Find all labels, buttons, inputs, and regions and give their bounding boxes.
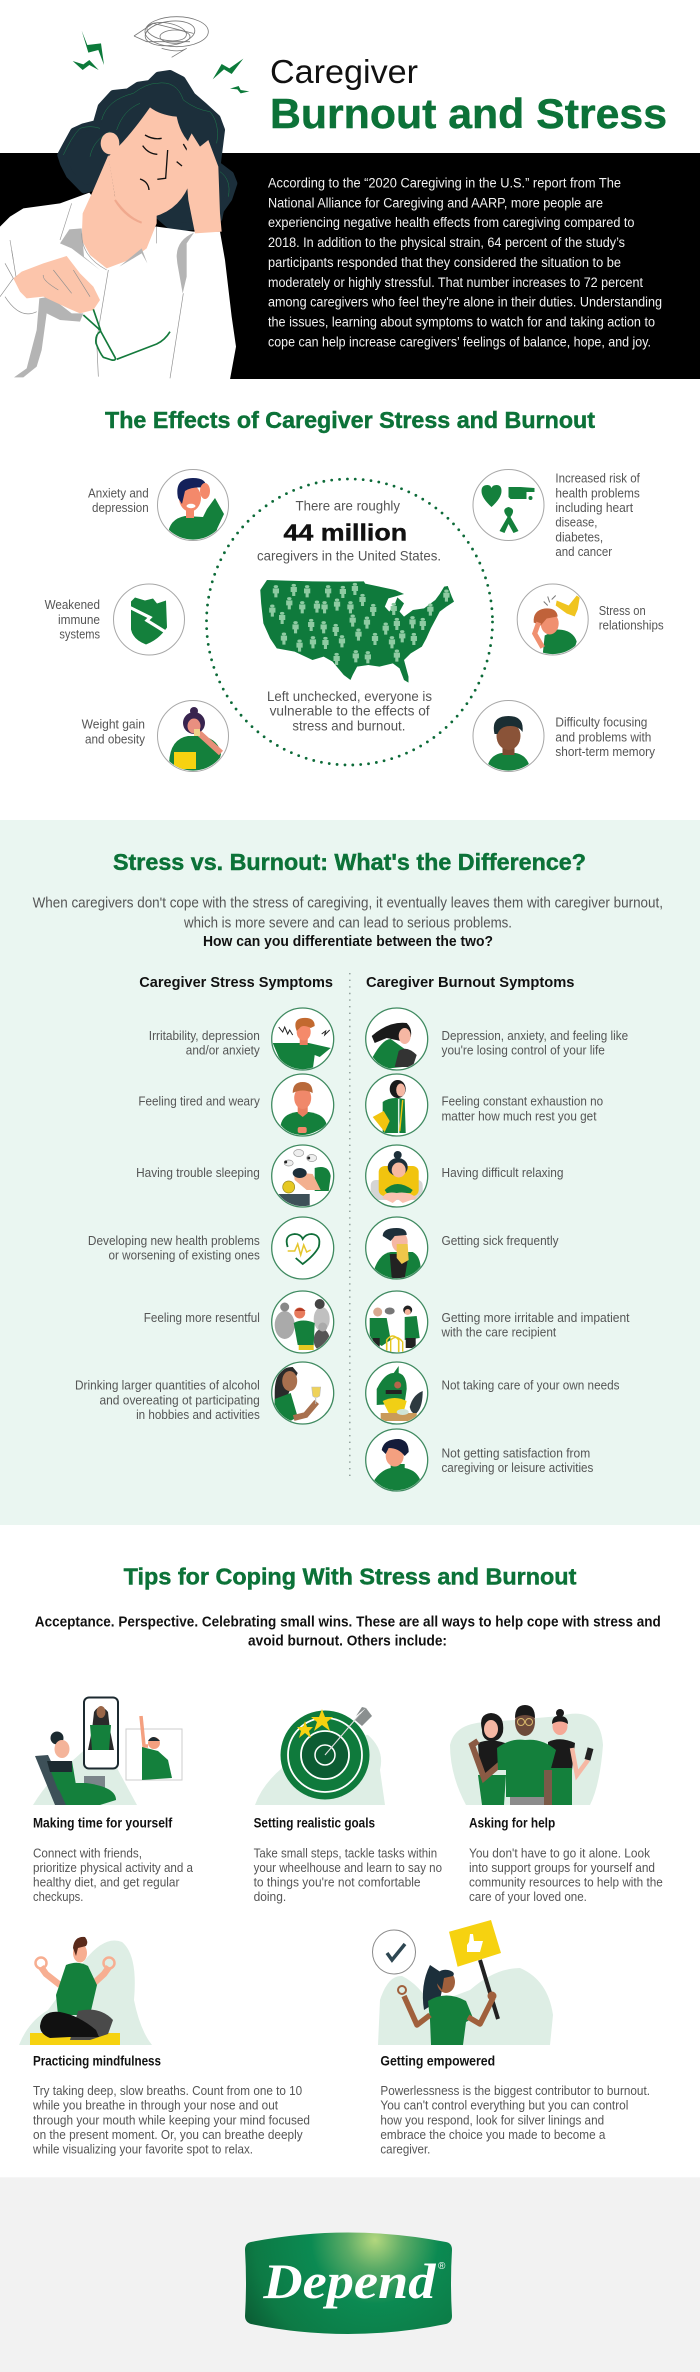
text: tip body: Take small steps, tackle tasks within xyxy=(254,1845,437,1860)
tip: setting realistic goals xyxy=(254,1707,442,1904)
effect: difficulty focusing: short-term memory xyxy=(555,744,655,759)
text: lead-in xyxy=(35,1615,661,1650)
text: intro paragraph: moderately or highly stressful. That number increases to 72 percent xyxy=(268,275,643,290)
text: tip body: You can't control everything but you can control xyxy=(380,2098,628,2113)
effect: weakened immune systems: Weakened xyxy=(45,597,100,612)
text: tip body: through your mouth while keeping your mind focused xyxy=(33,2112,310,2127)
panel: footer xyxy=(0,2177,700,2372)
icon: person blamed by pointing hand xyxy=(517,584,588,655)
text: tip body: on the present moment. Or, you can breathe deeply xyxy=(33,2127,303,2142)
text: tip body: while you breathe in through your nose and out xyxy=(32,2098,278,2113)
tip: getting empowered xyxy=(372,1920,650,2157)
icon: woman with wine glass xyxy=(272,1362,334,1424)
text: intro paragraph xyxy=(268,176,662,350)
text: 44 million stat xyxy=(257,498,441,564)
text: tip body: embrace the choice you made to become a xyxy=(380,2127,606,2142)
panel: stress vs burnout xyxy=(0,820,700,1525)
text: left unchecked: stress and burnout. xyxy=(292,717,405,733)
effect: difficulty focusing: Difficulty focusing xyxy=(555,715,647,730)
symptom: losing control: you're losing control of your life xyxy=(442,1043,605,1058)
text: tip body: how you respond, look for silver linings and xyxy=(380,2112,604,2127)
map: United States with caregiver figures xyxy=(260,580,454,683)
symptom: health problems: or worsening of existing ones xyxy=(108,1248,260,1263)
effect: anxiety and depression: depression xyxy=(92,500,149,515)
text: tip body: while visualizing your favorite spot to relax. xyxy=(32,2142,253,2157)
text: 44 million stat: There are roughly xyxy=(296,498,400,514)
symptom: alcohol and overeating: in hobbies and activities xyxy=(136,1407,260,1422)
dotted circle xyxy=(206,479,492,765)
tip: practicing mindfulness: Practicing mindfulness xyxy=(33,2054,161,2069)
column headings: Caregiver Burnout Symptoms xyxy=(366,975,574,991)
tip: practicing mindfulness xyxy=(19,1937,310,2157)
text: tip body: Powerlessness is the biggest contributor to burnout. xyxy=(380,2083,650,2098)
text: tip body: You don't have to go it alone. Look xyxy=(469,1845,650,1860)
symptom: tired and weary: Feeling tired and weary xyxy=(138,1094,260,1109)
text: tip body: prioritize physical activity and a xyxy=(33,1860,194,1875)
icon: depressed woman xyxy=(366,1008,428,1070)
symptom: alcohol and overeating: and overeating ot participating xyxy=(100,1392,260,1407)
text: intro paragraph: According to the “2020 Caregiving in the U.S.” report from The xyxy=(268,176,621,190)
text: introduction xyxy=(33,895,663,950)
text: lead-in: avoid burnout. Others include: xyxy=(248,1634,447,1650)
effect: stress on relationships xyxy=(517,584,664,655)
symptom: difficult relaxing xyxy=(366,1145,564,1207)
illustration: meditating person xyxy=(19,1937,152,2045)
effect: weight gain and obesity: and obesity xyxy=(85,731,145,746)
effect: difficulty focusing xyxy=(473,700,655,772)
effect: anxiety and depression: Anxiety and xyxy=(88,485,149,500)
symptom: getting sick xyxy=(366,1217,559,1280)
effect: weakened immune systems: systems xyxy=(59,627,100,642)
text: tip body: to things you're not comfortable xyxy=(254,1874,421,1889)
effect: health problems: diabetes, xyxy=(555,529,603,544)
icon: caregiver and elder xyxy=(366,1291,428,1353)
text: intro paragraph: participants responded that they considered the situation to be xyxy=(268,255,621,270)
icon: unsatisfied man xyxy=(366,1429,428,1491)
text: introduction: How can you differentiate between the two? xyxy=(203,934,493,950)
effect: health problems: Increased risk of xyxy=(555,471,640,486)
heading: Stress vs. Burnout: What's the Difference? xyxy=(113,849,586,875)
symptom: constant exhaustion: Feeling constant exhaustion no xyxy=(442,1094,603,1109)
symptom: irritable with care recipient xyxy=(366,1291,630,1353)
text: intro paragraph: cope can help increase caregivers’ feelings of balance, hope, and joy. xyxy=(268,334,651,350)
icon: tired man xyxy=(272,1074,334,1136)
icon: anxious person xyxy=(158,470,228,540)
lower arm and glasses xyxy=(0,250,183,378)
effect: health problems: disease, xyxy=(555,515,597,530)
effect: health problems: and cancer xyxy=(555,544,613,559)
text: tip body xyxy=(254,1845,442,1904)
text: left unchecked: vulnerable to the effects of xyxy=(270,703,430,719)
effect: weakened immune systems: immune xyxy=(58,612,100,627)
text: tip body: into support groups for yourself and xyxy=(469,1860,655,1875)
symptom: irritability: and/or anxiety xyxy=(186,1043,260,1058)
panel: header xyxy=(0,17,700,379)
effect: weakened immune systems xyxy=(45,584,184,655)
column headings xyxy=(139,975,575,991)
symptom: no satisfaction xyxy=(366,1429,594,1491)
effect: health problems xyxy=(473,470,640,559)
text: tip body: your wheelhouse and learn to say no xyxy=(254,1860,442,1875)
symptom: health problems: Developing new health problems xyxy=(88,1233,260,1248)
text: introduction: which is more severe and can lead to serious problems. xyxy=(183,914,512,931)
icon: broken shield xyxy=(114,584,184,655)
symptom: tired and weary xyxy=(138,1074,334,1136)
panel: effects of stress and burnout xyxy=(45,407,664,772)
tip: making time for yourself xyxy=(33,1698,194,1904)
text: tip body xyxy=(33,1845,194,1904)
text: tip body xyxy=(380,2083,650,2157)
tip: asking for help xyxy=(450,1705,663,1904)
symptom: resentful: Feeling more resentful xyxy=(144,1310,260,1325)
effect: weight gain and obesity: Weight gain xyxy=(82,717,145,732)
text: intro paragraph: the issues, learning about symptoms to watch for and taking action to xyxy=(268,315,655,330)
symptom: constant exhaustion xyxy=(366,1074,603,1136)
logo: Depend: Depend xyxy=(262,2253,436,2309)
effect: stress on relationships: Stress on xyxy=(599,603,646,618)
effect: stress on relationships: relationships xyxy=(599,618,664,633)
effect: health problems: health problems xyxy=(555,485,640,500)
symptom: not taking care: Not taking care of your own needs xyxy=(442,1378,620,1393)
effect: health problems: including heart xyxy=(555,500,633,515)
effect: weight gain and obesity xyxy=(82,700,228,772)
symptom: alcohol and overeating: Drinking larger quantities of alcohol xyxy=(75,1378,260,1393)
symptom: getting sick: Getting sick frequently xyxy=(442,1233,559,1248)
icon: heart with pulse xyxy=(272,1217,334,1279)
title: Caregiver xyxy=(270,53,418,90)
text: tip body xyxy=(469,1845,663,1904)
symptom: losing control xyxy=(366,1008,628,1070)
icon: sick person with tissue xyxy=(366,1217,428,1280)
text: 44 million stat: caregivers in the United States. xyxy=(257,548,441,564)
text: left unchecked: Left unchecked, everyone is xyxy=(267,688,432,704)
upper body and head xyxy=(0,74,236,379)
icon: person in chair with clutter xyxy=(366,1362,428,1424)
section background xyxy=(0,820,700,1525)
text: intro paragraph: among caregivers who feel they're alone in their duties. Understanding xyxy=(268,295,662,310)
text: left unchecked xyxy=(267,688,432,733)
icon: woman eating xyxy=(158,700,228,772)
symptom: health problems xyxy=(88,1217,334,1279)
column headings: Caregiver Stress Symptoms xyxy=(139,975,333,991)
illustration: stressed caregiver xyxy=(0,17,249,379)
symptom: resentful xyxy=(144,1291,334,1353)
symptom: trouble sleeping xyxy=(136,1145,334,1207)
logo: Depend xyxy=(245,2232,452,2334)
tip: making time for yourself: Making time for yourself xyxy=(33,1816,173,1831)
symptom: irritable with care recipient: with the care recipient xyxy=(441,1325,557,1340)
icon: lightning bolts xyxy=(73,31,249,93)
text: tip body: Try taking deep, slow breaths. Count from one to 10 xyxy=(33,2083,302,2098)
heading: Tips for Coping With Stress and Burnout xyxy=(124,1563,577,1589)
icon: confused man xyxy=(473,700,544,772)
text: tip body: community resources to help with the xyxy=(469,1874,663,1889)
symptom: trouble sleeping: Having trouble sleeping xyxy=(136,1165,260,1180)
illustration: video call xyxy=(33,1698,182,1805)
icon: resentful person among others xyxy=(272,1291,334,1353)
symptom: not taking care xyxy=(366,1362,620,1424)
title: Burnout and Stress xyxy=(270,90,667,137)
icon: sleepless person xyxy=(272,1145,334,1207)
symptom: irritability xyxy=(149,1008,334,1070)
logo: Depend: ® xyxy=(438,2261,446,2272)
illustration: three people xyxy=(450,1705,603,1805)
effect: anxiety and depression xyxy=(88,470,228,540)
illustration: target with stars xyxy=(255,1707,385,1805)
icon: scribble xyxy=(134,17,208,57)
text: intro paragraph: experiencing negative health effects from caregiving compared to xyxy=(268,215,634,230)
symptom: alcohol and overeating xyxy=(75,1362,334,1424)
symptom: no satisfaction: caregiving or leisure activities xyxy=(442,1460,594,1475)
tip: setting realistic goals: Setting realistic goals xyxy=(254,1816,375,1831)
symptom: losing control: Depression, anxiety, and feeling like xyxy=(442,1028,628,1043)
text: tip body: caregiver. xyxy=(380,2142,430,2157)
symptom: irritability: Irritability, depression xyxy=(149,1028,260,1043)
black intro band xyxy=(0,153,700,379)
symptom: difficult relaxing: Having difficult relaxing xyxy=(442,1165,564,1180)
text: lead-in: Acceptance. Perspective. Celebrating small wins. These are all ways to help cope with stress and xyxy=(35,1615,661,1631)
symptom: no satisfaction: Not getting satisfaction from xyxy=(442,1445,590,1460)
text: tip body: checkups. xyxy=(33,1889,83,1904)
text: intro paragraph: National Alliance for Caregiving and AARP, more people are xyxy=(268,195,603,210)
title xyxy=(270,53,667,137)
illustration: woman with thumbs-up sign xyxy=(372,1920,553,2045)
icon: woman on pillow xyxy=(366,1145,428,1207)
text: tip body: care of your loved one. xyxy=(469,1889,587,1904)
tip: asking for help: Asking for help xyxy=(469,1816,555,1831)
panel: coping tips xyxy=(19,1563,663,2157)
symptom: irritable with care recipient: Getting more irritable and impatient xyxy=(442,1310,630,1325)
symptom: constant exhaustion: matter how much rest you get xyxy=(442,1108,597,1123)
icon: heart, hand and ribbon xyxy=(473,470,544,540)
icon: exhausted woman with bag xyxy=(366,1074,428,1136)
text: tip body: doing. xyxy=(254,1889,286,1904)
heading: The Effects of Caregiver Stress and Burnout xyxy=(105,407,595,433)
text: 44 million stat: 44 million xyxy=(284,520,407,546)
text: tip body: healthy diet, and get regular xyxy=(33,1874,180,1889)
text: intro paragraph: 2018. In addition to the physical strain, 64 percent of the study’s xyxy=(268,235,625,250)
tip: getting empowered: Getting empowered xyxy=(380,2054,495,2069)
icon: angry man xyxy=(272,1008,334,1070)
text: tip body: Connect with friends, xyxy=(33,1845,142,1860)
effect: difficulty focusing: and problems with xyxy=(555,729,651,744)
text: tip body xyxy=(32,2083,310,2157)
